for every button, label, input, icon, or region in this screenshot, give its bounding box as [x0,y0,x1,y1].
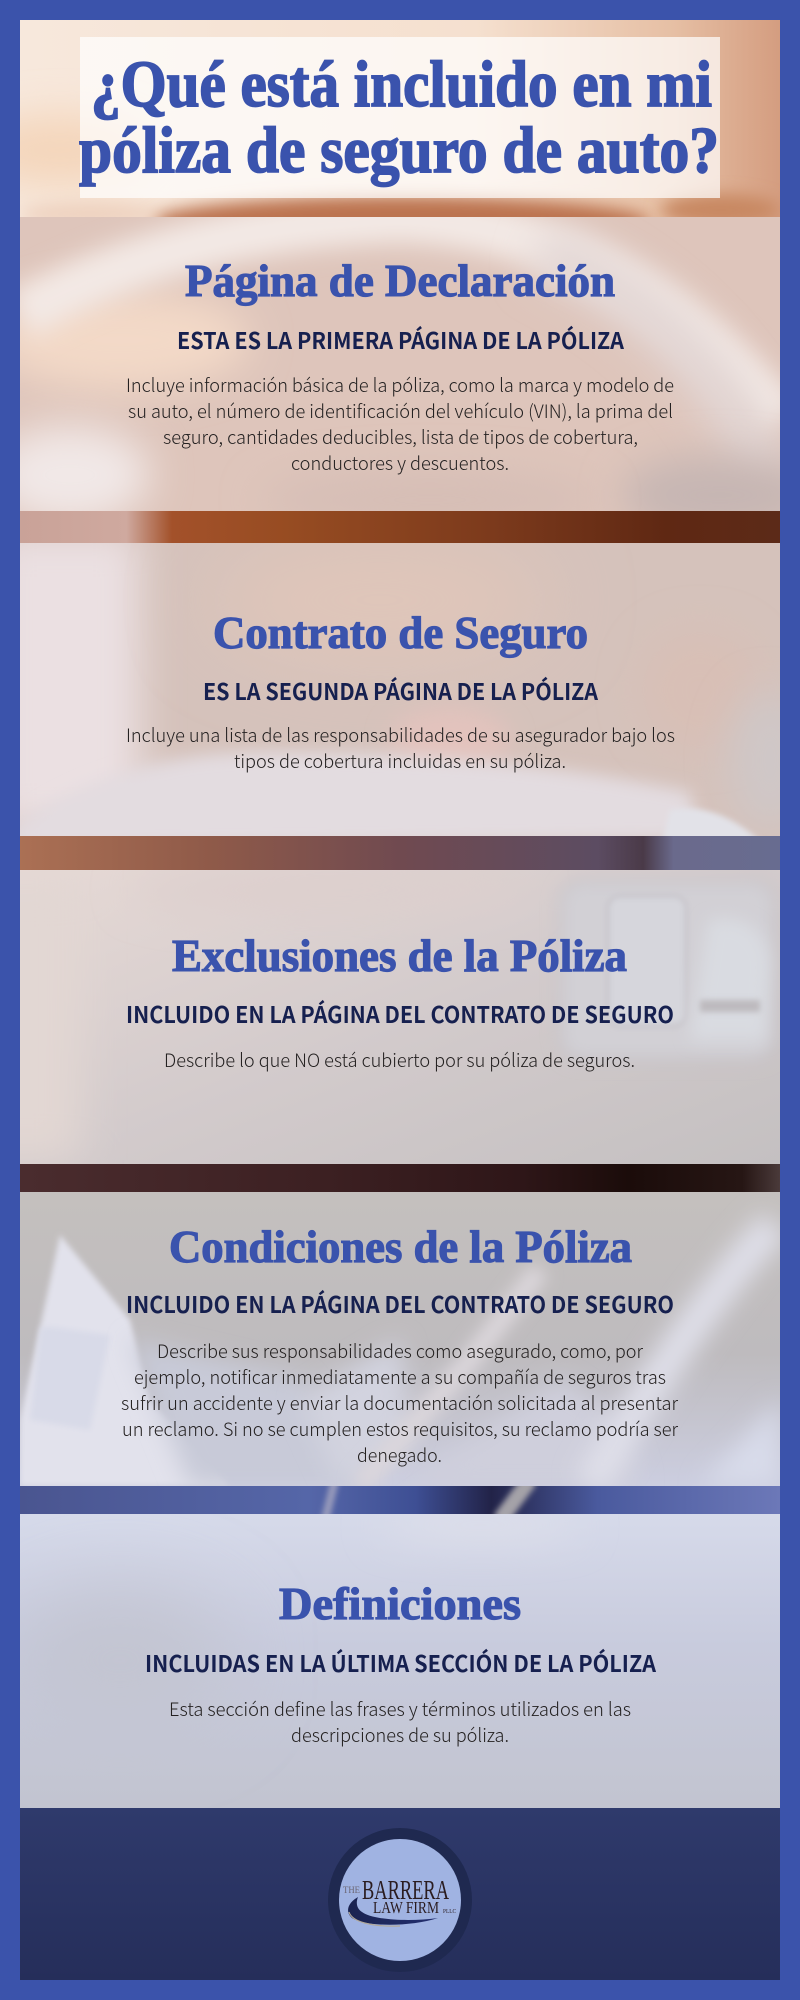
photo strip 1 [20,511,780,543]
body text: un reclamo. Si no se cumplen estos requisitos, su reclamo podría ser [122,1416,678,1442]
heading: Condiciones de la Póliza [169,1221,632,1272]
logo disc [339,1839,461,1961]
heading: Página de Declaración [185,255,615,306]
subheading: INCLUIDO EN LA PÁGINA DEL CONTRATO DE SEGURO [126,1286,674,1320]
body text: conductores y descuentos. [291,450,509,476]
body text [121,1338,678,1468]
heading: Exclusiones de la Póliza [172,930,627,981]
logo: The Barrera Law Firm: THE [343,1885,360,1895]
photo strip 4 [20,1486,780,1514]
panel: Definiciones [10,1511,780,1808]
body text: Describe lo que NO está cubierto por su póliza de seguros. [164,1047,635,1073]
subheading: INCLUIDO EN LA PÁGINA DEL CONTRATO DE SEGURO [126,996,674,1030]
body text [126,372,674,476]
subheading: ES LA SEGUNDA PÁGINA DE LA PÓLIZA [203,673,598,707]
panel: Contrato de Seguro [20,543,780,836]
heading: Contrato de Seguro [213,607,588,658]
title [79,48,719,187]
subheading: INCLUIDAS EN LA ÚLTIMA SECCIÓN DE LA PÓLIZA [145,1645,656,1679]
panel: Condiciones de la Póliza [20,1192,780,1486]
logo: The Barrera Law Firm [343,1875,456,1926]
panel: Exclusiones de la Póliza [0,866,780,1164]
photo strip 2 [20,836,780,870]
title: póliza de seguro de auto? [79,114,719,187]
title: ¿Qué está incluido en mi [91,48,712,121]
header band with title [20,20,780,217]
heading: Definiciones [279,1578,521,1629]
footer band with logo [20,1808,780,1980]
body text: denegado. [357,1442,442,1468]
photo strip 3 [20,1164,780,1192]
body text: Esta sección define las frases y términos utilizados en las [169,1696,631,1722]
body text: tipos de cobertura incluidas en su póliza. [234,748,566,774]
title backing box [80,37,720,198]
logo ring [328,1828,472,1972]
subheading: ESTA ES LA PRIMERA PÁGINA DE LA PÓLIZA [177,322,624,356]
logo: The Barrera Law Firm: BARRERA [362,1875,449,1905]
panel: Página de Declaración [20,217,780,511]
body text: Incluye una lista de las responsabilidades de su asegurador bajo los [126,722,675,748]
body text [169,1696,631,1748]
body text: sufrir un accidente y enviar la documentación solicitada al presentar [121,1390,678,1416]
body text: Incluye información básica de la póliza, como la marca y modelo de [126,372,674,398]
body text: Describe sus responsabilidades como asegurado, como, por [157,1338,643,1364]
logo: The Barrera Law Firm: LAW FIRM [373,1898,439,1917]
body text: ejemplo, notificar inmediatamente a su compañía de seguros tras [134,1364,666,1390]
body text: seguro, cantidades deducibles, lista de tipos de cobertura, [163,424,638,450]
logo: The Barrera Law Firm: PLLC [443,1908,456,1915]
body text [126,722,675,774]
body text: su auto, el número de identificación del vehículo (VIN), la prima del [128,398,673,424]
body text: descripciones de su póliza. [291,1722,509,1748]
